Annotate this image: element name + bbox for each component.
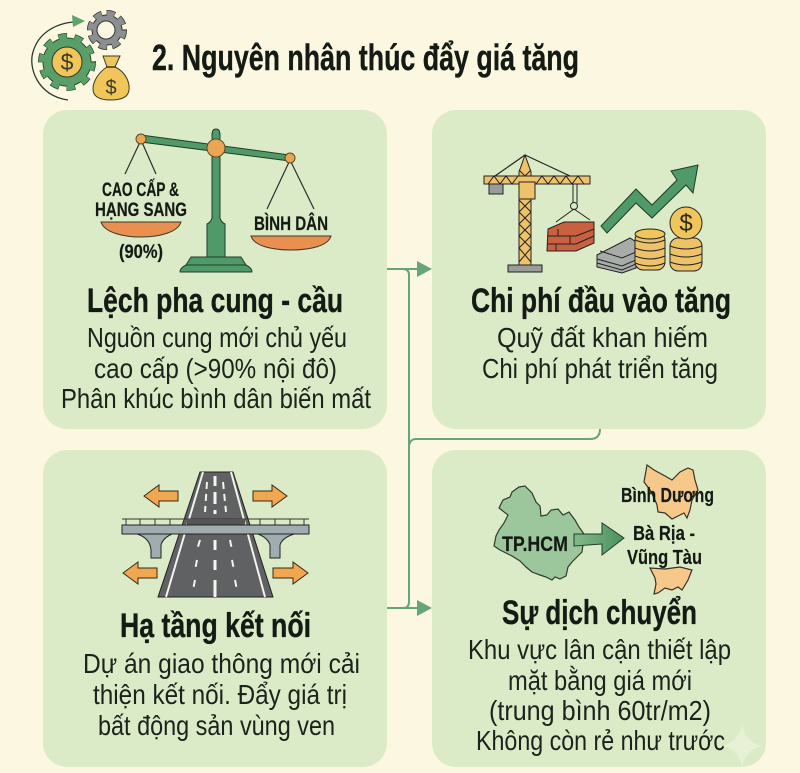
panel: supply-demand mismatch <box>43 110 387 429</box>
icon: balance scale: HẠNG SANG <box>95 200 187 221</box>
arrow: connector trunk and branch from input costs panel <box>409 275 600 602</box>
icon: map of shift from TP.HCM to neighbouring provinces: Vũng Tàu <box>627 547 702 569</box>
header icon: gears and money bag: $ <box>105 77 117 99</box>
text block: input costs: Quỹ đất khan hiếm <box>497 322 708 353</box>
heading: infrastructure: Hạ tầng kết nối <box>120 607 311 645</box>
panel: market shift <box>432 450 766 767</box>
text block: infrastructure <box>83 648 360 741</box>
text block: shift <box>468 634 731 756</box>
header icon: gears and money bag: $ <box>61 49 74 75</box>
text block: shift: mặt bằng giá mới <box>508 665 692 696</box>
icon: map of shift from TP.HCM to neighbouring provinces: Bình Dương <box>621 485 714 507</box>
heading: shift: Sự dịch chuyển <box>502 594 697 632</box>
text block: supply-demand: cao cấp (>90% nội đô) <box>94 353 337 384</box>
text block: shift: Khu vực lân cận thiết lập <box>468 634 731 665</box>
title: 2. Nguyên nhân thúc đẩy giá tăng <box>152 37 579 78</box>
header icon: gears and money bag <box>32 14 129 100</box>
heading: supply-demand: Lệch pha cung - cầu <box>87 282 343 320</box>
arrow: connector to market shift panel <box>387 600 432 616</box>
text block: infrastructure: Dự án giao thông mới cải <box>83 648 360 679</box>
icon: balance scale: BÌNH DÂN <box>254 213 328 235</box>
icon: balance scale: CAO CẤP & <box>102 179 179 201</box>
icon: map of shift from TP.HCM to neighbouring provinces: Bà Rịa - <box>633 523 695 545</box>
text block: shift: (trung bình 60tr/m2) <box>489 695 711 726</box>
panel: connecting infrastructure <box>43 450 387 767</box>
icon: highway overpass with arrows <box>122 472 309 597</box>
heading: input costs: Chi phí đầu vào tăng <box>471 282 731 320</box>
text block: supply-demand <box>61 322 371 414</box>
text block: input costs: Chi phí phát triển tăng <box>482 353 718 384</box>
text block: input costs <box>482 322 718 384</box>
icon: crane, bricks, rising arrow and coins <box>484 155 702 273</box>
text block: supply-demand: Nguồn cung mới chủ yếu <box>87 322 347 353</box>
panel: rising input costs <box>432 110 766 429</box>
icon: map of shift from TP.HCM to neighbouring provinces <box>494 465 714 594</box>
icon: balance scale <box>95 129 331 272</box>
arrow: connector to input costs panel <box>387 261 432 277</box>
icon: crane, bricks, rising arrow and coins: $ <box>679 210 693 237</box>
icon: balance scale: (90%) <box>119 242 163 263</box>
icon: map of shift from TP.HCM to neighbouring provinces: TP.HCM <box>502 533 568 556</box>
decorative sparkle: bottom right <box>722 724 762 767</box>
text block: supply-demand: Phân khúc bình dân biến mất <box>61 383 371 414</box>
text block: infrastructure: bất động sản vùng ven <box>98 710 335 741</box>
text block: shift: Không còn rẻ như trước <box>476 725 725 756</box>
text block: infrastructure: thiện kết nối. Đẩy giá trị <box>93 679 347 710</box>
